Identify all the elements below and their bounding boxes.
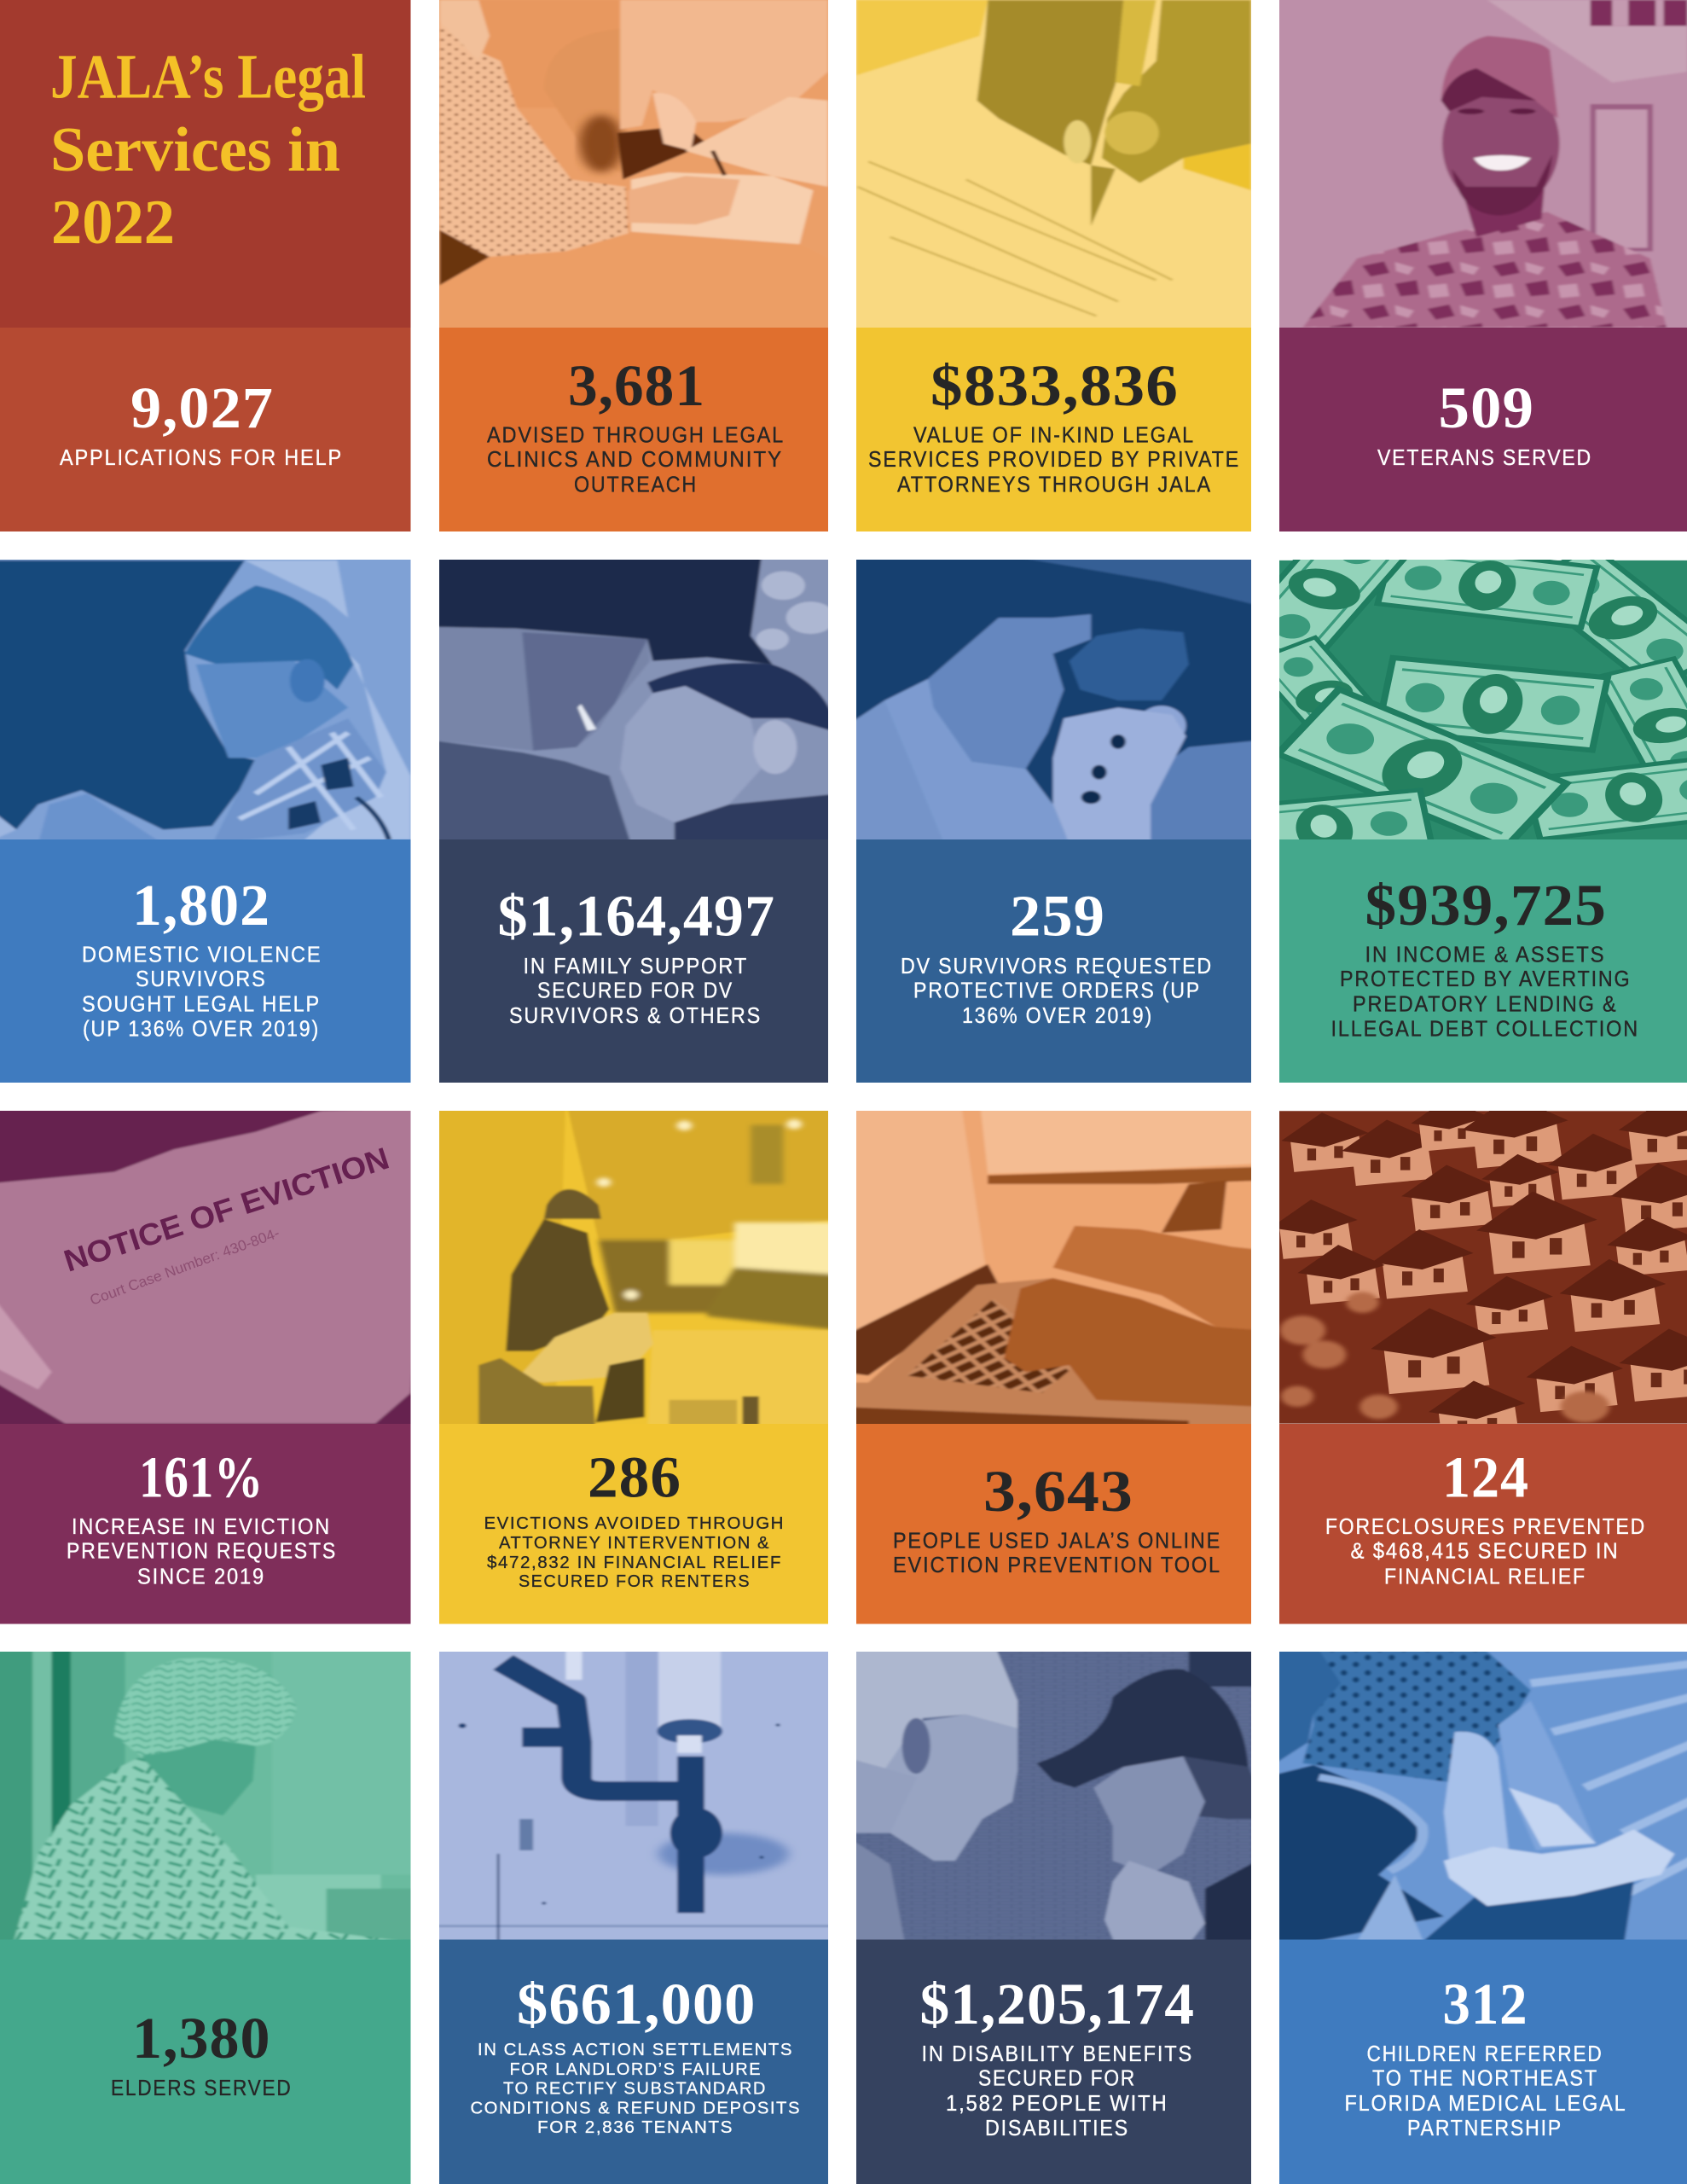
label: INCREASE IN EVICTION <box>72 1513 331 1539</box>
panel: family support secured <box>424 549 844 1083</box>
number: $833,836: $833,836 <box>930 353 1179 418</box>
label: ADVISED THROUGH LEGAL <box>487 421 785 447</box>
stat panel <box>1279 1424 1687 1624</box>
label <box>901 953 1213 1028</box>
label: VETERANS SERVED <box>1377 444 1592 470</box>
label: 1,582 PEOPLE WITH <box>946 2090 1168 2116</box>
number: 1,802: 1,802 <box>132 873 270 938</box>
label: PREDATORY LENDING & <box>1353 991 1617 1017</box>
label: ATTORNEYS THROUGH JALA <box>897 472 1212 497</box>
number: 259: 259 <box>1010 884 1105 949</box>
label <box>471 2041 801 2137</box>
panel: veterans served <box>1265 0 1687 531</box>
label: SECURED FOR RENTERS <box>519 1572 751 1591</box>
photo: smiling veteran in camouflage <box>1265 0 1687 338</box>
label: SURVIVORS <box>136 966 266 991</box>
number: 509: 509 <box>1438 375 1534 440</box>
label: SECURED FOR <box>978 2065 1136 2090</box>
label: IN FAMILY SUPPORT <box>524 953 748 979</box>
label: $472,832 IN FINANCIAL RELIEF <box>487 1554 782 1572</box>
photo: notice of eviction paper: Court Case Number: 430-804- <box>88 1225 281 1309</box>
stat panel <box>439 1940 828 2184</box>
label <box>487 421 785 497</box>
label: & $468,415 SECURED IN <box>1351 1538 1619 1564</box>
photo: person sitting on a city street at night <box>439 1111 828 1424</box>
panel: disability benefits <box>841 1641 1270 2184</box>
photo: older man and young man laughing <box>841 1641 1270 1951</box>
label: PREVENTION REQUESTS <box>67 1538 337 1564</box>
photo: rusty pipes on a stained wall <box>424 1641 844 1951</box>
panel: elders served <box>0 1641 427 2184</box>
label: (UP 136% OVER 2019) <box>83 1015 320 1041</box>
label: FORECLOSURES PREVENTED <box>1325 1513 1646 1539</box>
label: DOMESTIC VIOLENCE <box>82 941 322 967</box>
label: ILLEGAL DEBT COLLECTION <box>1330 1015 1639 1041</box>
stat panel <box>0 328 411 531</box>
label: IN CLASS ACTION SETTLEMENTS <box>478 2041 793 2059</box>
stat panel <box>856 839 1251 1083</box>
title <box>50 43 366 258</box>
stat panel <box>0 1940 411 2184</box>
stat panel <box>1279 1940 1687 2184</box>
number: $1,164,497: $1,164,497 <box>498 884 775 949</box>
label: DISABILITIES <box>985 2115 1129 2140</box>
label: TO THE NORTHEAST <box>1372 2065 1598 2090</box>
number: 124: 124 <box>1442 1445 1529 1510</box>
label: FLORIDA MEDICAL LEGAL <box>1344 2090 1627 2116</box>
panel: class action settlements <box>424 1641 844 2184</box>
label: FOR LANDLORD’S FAILURE <box>510 2060 762 2079</box>
stat panel <box>439 1424 828 1624</box>
number: 3,681: 3,681 <box>568 353 705 418</box>
label: SINCE 2019 <box>137 1563 265 1589</box>
label <box>921 2041 1193 2140</box>
number: 3,643: 3,643 <box>983 1459 1133 1524</box>
panel: online eviction tool <box>841 1101 1270 1624</box>
number: 9,027: 9,027 <box>130 375 274 440</box>
title: 2022 <box>51 188 175 258</box>
panel: domestic violence survivors <box>0 549 427 1083</box>
stat panel <box>856 328 1251 531</box>
photo: two women at a desk signing paper <box>424 0 844 338</box>
label <box>1344 2041 1627 2140</box>
number: $939,725: $939,725 <box>1365 873 1607 938</box>
label: SOUGHT LEGAL HELP <box>82 991 321 1017</box>
panel: title card with applications stat <box>0 0 411 531</box>
stat panel <box>0 839 411 1083</box>
label: TO RECTIFY SUBSTANDARD <box>503 2080 767 2099</box>
label: CLINICS AND COMMUNITY <box>487 446 783 472</box>
panel: protective orders <box>841 549 1270 1083</box>
label: IN DISABILITY BENEFITS <box>921 2041 1193 2066</box>
label <box>1330 941 1639 1041</box>
panel: income and assets protected <box>1279 560 1687 1083</box>
number: 161%: 161% <box>139 1445 264 1510</box>
label: ELDERS SERVED <box>111 2075 292 2100</box>
title: Services in <box>50 115 340 185</box>
title: JALA’s Legal <box>50 43 366 113</box>
number: $1,205,174: $1,205,174 <box>919 1972 1195 2036</box>
stat panel <box>856 1424 1251 1624</box>
stat panel <box>0 1424 411 1624</box>
label: SECURED FOR DV <box>537 978 733 1003</box>
label <box>484 1514 785 1591</box>
photo: elderly woman in a kitchen <box>0 1641 427 1951</box>
number: 312: 312 <box>1443 1972 1528 2036</box>
label: PROTECTED BY AVERTING <box>1340 966 1631 991</box>
stat panel <box>1279 328 1687 531</box>
label: PROTECTIVE ORDERS (UP <box>913 978 1201 1003</box>
number: $661,000: $661,000 <box>517 1972 756 2036</box>
photo: hands typing on a laptop <box>856 1111 1251 1424</box>
photo: scattered dollar bills <box>1279 560 1687 839</box>
photo: mother and child touching foreheads <box>439 560 828 839</box>
label: EVICTION PREVENTION TOOL <box>893 1552 1221 1577</box>
label <box>868 421 1240 497</box>
stat panel <box>1279 839 1687 1083</box>
stat panel <box>439 328 828 531</box>
label: CONDITIONS & REFUND DEPOSITS <box>471 2099 801 2117</box>
photo: mother hugging a young boy <box>0 560 411 839</box>
label <box>893 1527 1221 1577</box>
panel: in-kind legal services <box>841 0 1270 531</box>
label <box>1325 1513 1646 1589</box>
label: PEOPLE USED JALA’S ONLINE <box>893 1527 1221 1553</box>
photo: aerial view of a neighborhood of houses <box>1279 1111 1687 1424</box>
label: OUTREACH <box>574 472 698 497</box>
label: EVICTIONS AVOIDED THROUGH <box>484 1514 785 1533</box>
label <box>67 1513 337 1589</box>
label: FOR 2,836 TENANTS <box>537 2118 733 2137</box>
label: ATTORNEY INTERVENTION & <box>499 1534 770 1553</box>
label: 136% OVER 2019) <box>962 1002 1153 1028</box>
label: DV SURVIVORS REQUESTED <box>901 953 1213 979</box>
photo: hands signing with a fountain pen <box>856 0 1251 328</box>
panel: foreclosures prevented <box>1271 1095 1687 1624</box>
number: 286: 286 <box>588 1445 681 1510</box>
label: PARTNERSHIP <box>1407 2115 1562 2140</box>
label: IN INCOME & ASSETS <box>1365 941 1605 967</box>
label <box>509 953 762 1028</box>
label: APPLICATIONS FOR HELP <box>60 444 343 470</box>
label: FINANCIAL RELIEF <box>1384 1563 1586 1589</box>
stat panel <box>439 839 828 1083</box>
photo: child in a wheelchair with leg braces <box>1265 1641 1687 1951</box>
number: 1,380: 1,380 <box>132 2006 271 2071</box>
label: SERVICES PROVIDED BY PRIVATE <box>868 446 1240 472</box>
panel: evictions avoided <box>424 1101 844 1624</box>
label <box>82 941 322 1041</box>
label: CHILDREN REFERRED <box>1366 2041 1603 2066</box>
stat panel <box>856 1940 1251 2184</box>
title background <box>0 0 411 328</box>
photo: notice of eviction paper <box>0 1111 411 1424</box>
photo: notice of eviction paper: NOTICE OF EVICTION <box>60 1141 393 1279</box>
photo: sleeping child hugging a teddy bear <box>856 560 1251 839</box>
label: SURVIVORS & OTHERS <box>509 1002 762 1028</box>
label: VALUE OF IN-KIND LEGAL <box>913 421 1195 447</box>
panel: children referred <box>1265 1641 1687 2184</box>
panel: advised through clinics <box>424 0 844 531</box>
panel: eviction prevention requests <box>0 1101 430 1624</box>
